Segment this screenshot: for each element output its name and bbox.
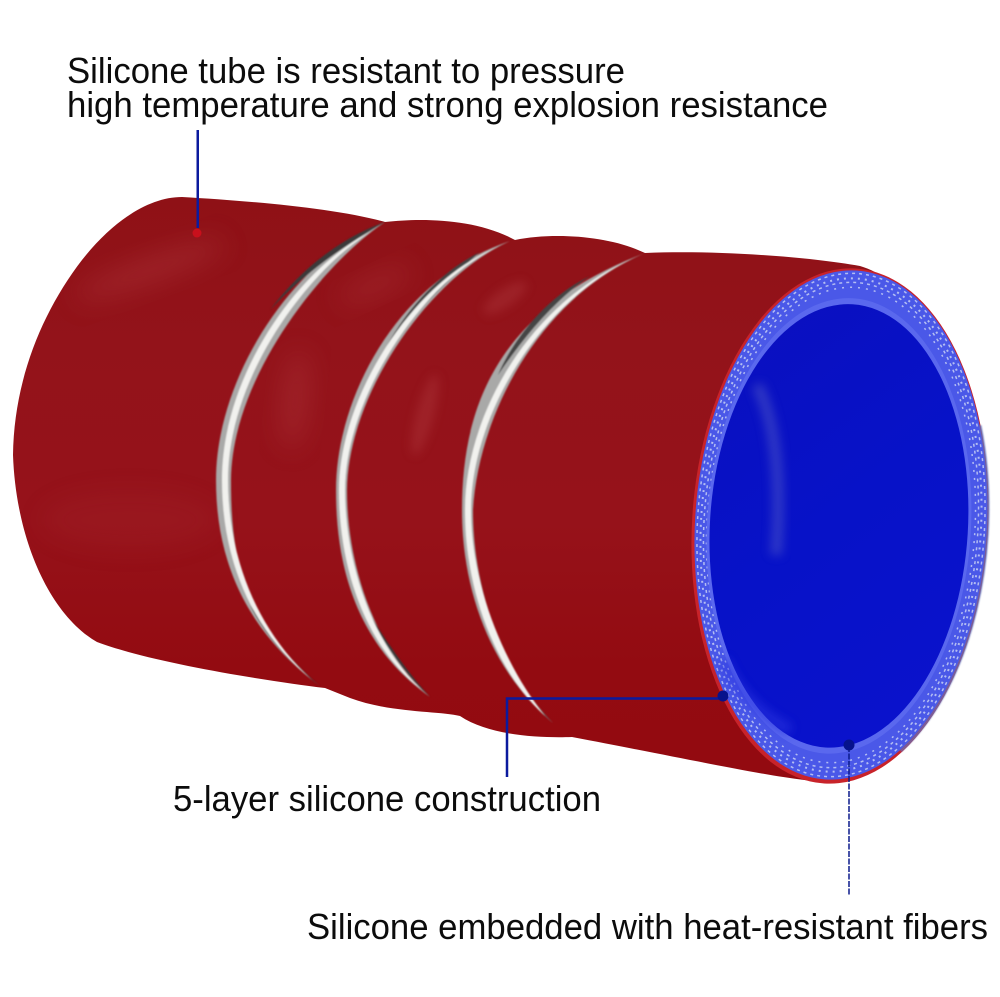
tube body: [13, 197, 987, 782]
leader: 5-layer construction: [507, 690, 728, 777]
interior reflection: [723, 385, 790, 730]
label: fibers: Silicone embedded with heat-resistant fibers: [307, 906, 988, 947]
blue interior: [697, 296, 981, 755]
heading text: Silicone tube is resistant to pressure: [67, 50, 625, 91]
inner lip: [693, 290, 985, 762]
grey wall edge: [901, 422, 994, 756]
light blue silicone wall with embedded fibers: [680, 262, 1000, 788]
leader: pressure resistance: [192, 130, 202, 238]
heading text: [67, 50, 828, 125]
surface highlights: [102, 248, 524, 450]
heading text: high temperature and strong explosion resistance: [67, 84, 828, 125]
metal clamp ring 2: [336, 241, 510, 697]
leader: heat-resistant fibers: [844, 740, 854, 896]
metal clamp ring 1: [216, 222, 385, 686]
metal clamp ring 3: [462, 253, 645, 723]
fiber texture: [682, 265, 1000, 785]
label: construction: 5-layer silicone construction: [173, 778, 601, 819]
red outer edge of tube end: [677, 259, 1000, 793]
